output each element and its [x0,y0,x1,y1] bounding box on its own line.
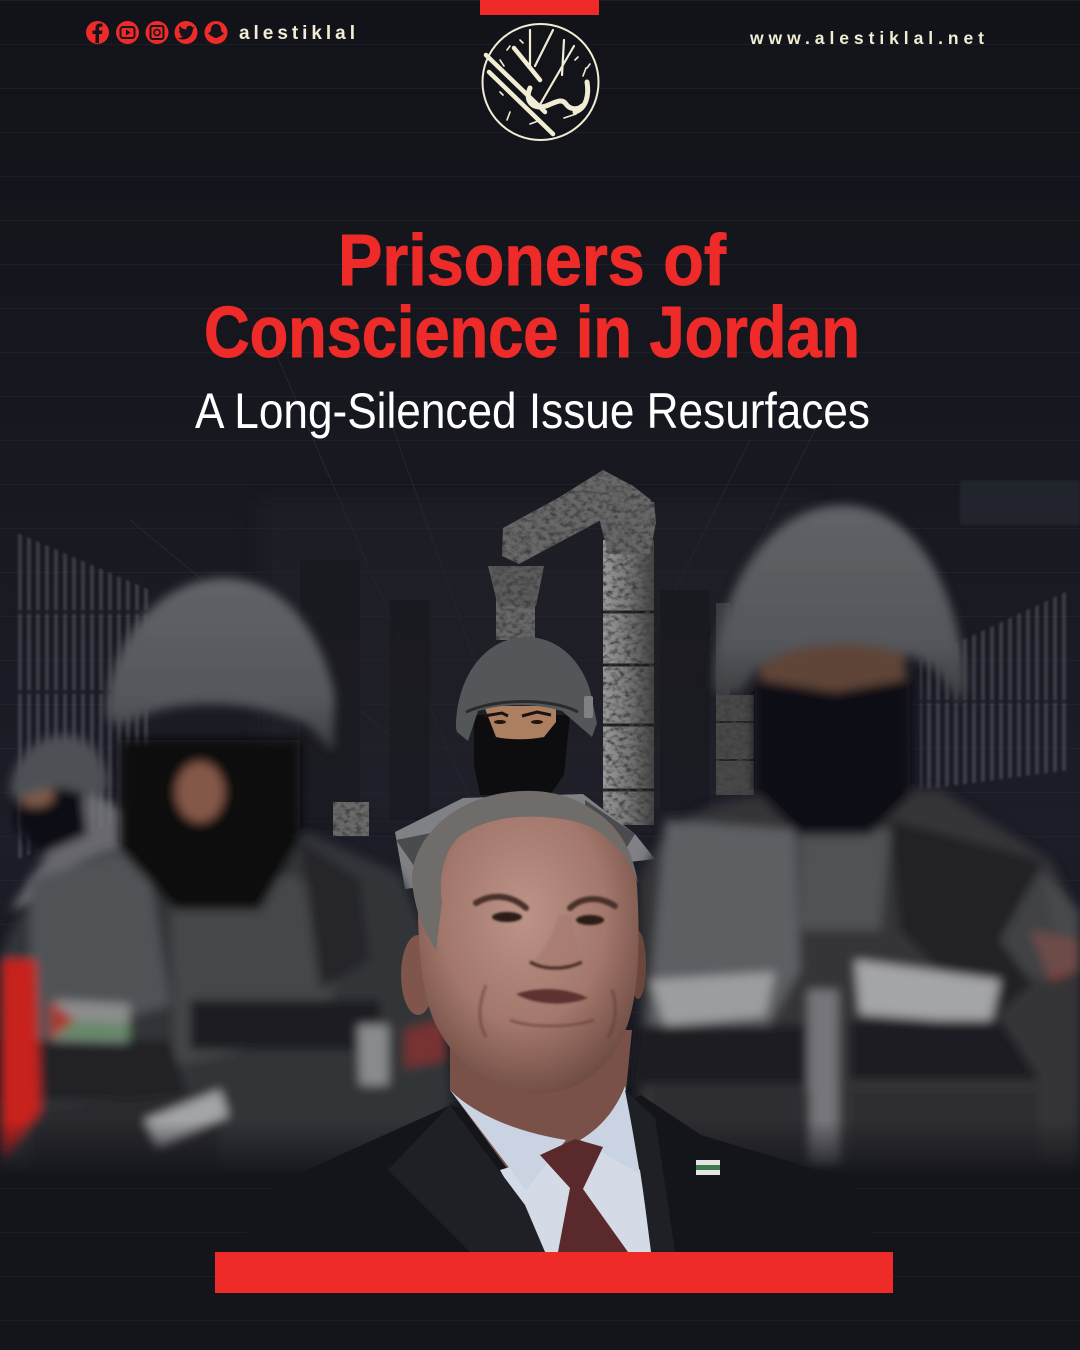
logo: calligraphic roundel [482,24,598,140]
hair [412,791,638,950]
left blurred soldier [0,578,452,1174]
subtitle: A Long-Silenced Issue Resurfaces [195,383,870,439]
website url: www.alestiklal.net [749,28,984,48]
header social icons [86,21,228,44]
lapels [388,1105,545,1252]
face [418,795,639,1093]
bottom red bar [215,1252,893,1293]
suit [246,1095,873,1252]
king portrait [246,791,873,1252]
title: Prisoners of [338,221,727,301]
fade at the base of the blurred soldiers [0,1120,1080,1180]
tie [540,1139,628,1252]
shirt front [500,1140,652,1252]
top accent bar [480,0,599,15]
header handle: alestiklal [239,23,355,44]
centre soldier [395,637,655,889]
title: Conscience in Jordan [204,293,860,373]
brows and eyes [476,897,615,1038]
ancient Amman citadel columns [333,470,754,836]
prison bars left [15,532,150,860]
prison bars right [920,480,1080,790]
ears [401,935,435,1015]
mouth [516,989,588,1004]
shirt collar [450,1086,640,1190]
right blurred soldier [630,505,1080,1175]
far-left blurred soldier [10,735,150,910]
title [204,221,860,373]
neck [450,1030,632,1200]
lapel pin [696,1160,720,1175]
nose [534,915,586,970]
